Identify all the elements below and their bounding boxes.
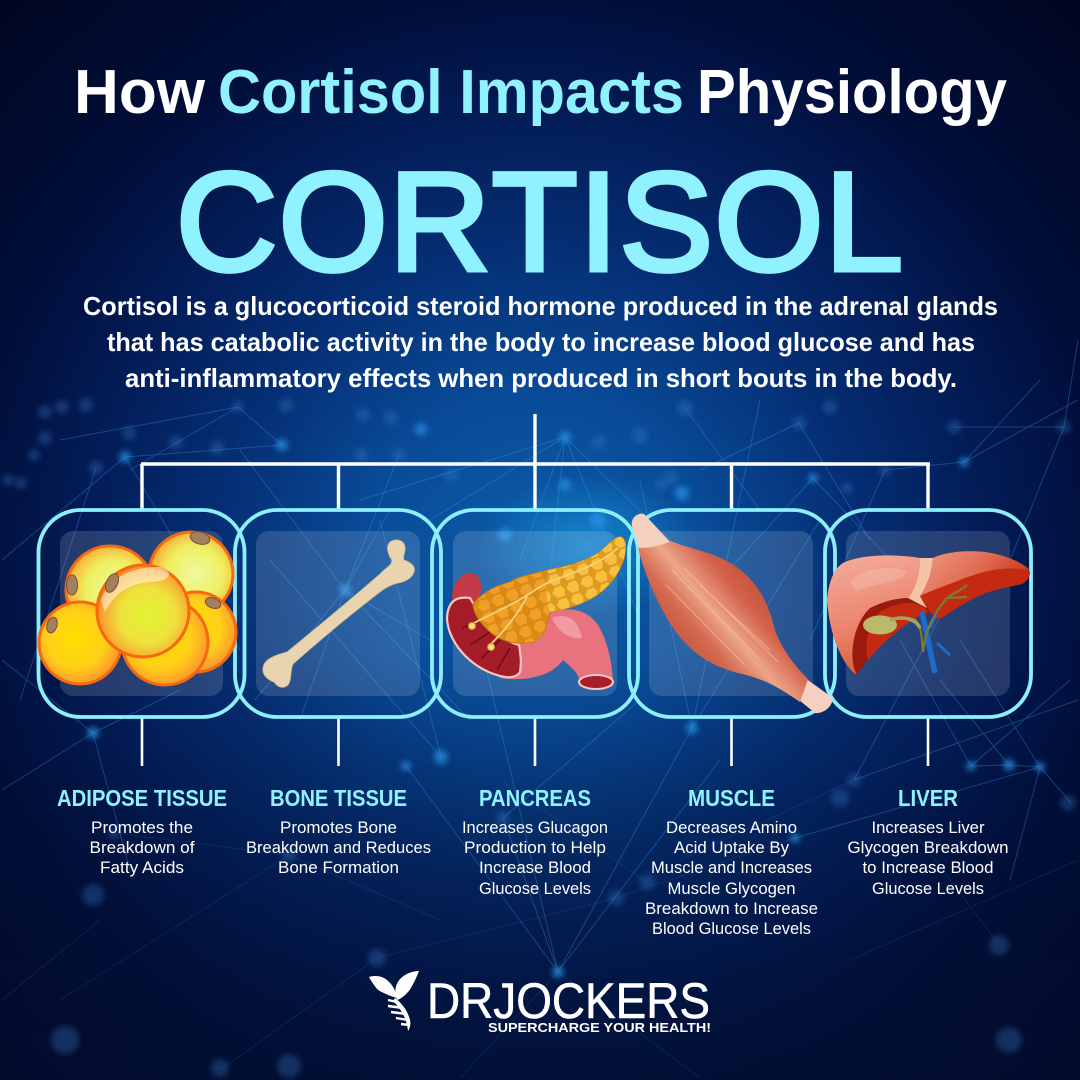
label: bone tissue: Breakdown and Reduces	[246, 838, 431, 857]
intro paragraph: Cortisol is a glucocorticoid steroid hormone produced in the adrenal glands	[83, 291, 998, 321]
icon: pancreas	[447, 537, 626, 689]
panel backgrounds	[60, 531, 1010, 696]
panel frames	[38, 510, 1031, 717]
icon: bone	[263, 540, 414, 687]
title: Cortisol Impacts	[218, 58, 684, 127]
label: liver: Glycogen Breakdown	[848, 838, 1008, 857]
label: adipose tissue	[57, 785, 227, 877]
label: bone tissue: Bone Formation	[278, 858, 399, 877]
label: bone tissue: BONE TISSUE	[270, 785, 407, 811]
icon: adipose cells	[39, 530, 236, 685]
label: muscle: Blood Glucose Levels	[652, 919, 811, 938]
label: adipose tissue: Fatty Acids	[100, 858, 184, 877]
label: adipose tissue: ADIPOSE TISSUE	[57, 785, 227, 811]
label: muscle: Acid Uptake By	[674, 838, 789, 857]
label: adipose tissue: Breakdown of	[90, 838, 195, 857]
label: pancreas: Glucose Levels	[479, 879, 591, 898]
connector tree	[141, 414, 930, 766]
label: muscle: Muscle Glycogen	[668, 879, 796, 898]
label: muscle: MUSCLE	[688, 785, 775, 811]
label: liver: LIVER	[898, 785, 958, 811]
pink intestine	[500, 609, 613, 682]
label: liver	[848, 785, 1008, 898]
label: pancreas: Increase Blood	[479, 858, 591, 877]
logo: DrJockers	[369, 971, 711, 1035]
label: liver: to Increase Blood	[862, 858, 994, 877]
title: How	[74, 58, 206, 127]
logo: DrJockers: DRJOCKERS	[427, 973, 710, 1029]
intro paragraph: that has catabolic activity in the body to increase blood glucose and has	[107, 327, 975, 357]
label: muscle: Muscle and Increases	[651, 858, 812, 877]
label: muscle: Breakdown to Increase	[645, 899, 818, 918]
label: bone tissue	[246, 785, 431, 877]
intro paragraph	[83, 291, 998, 393]
logo: DrJockers: SUPERCHARGE YOUR HEALTH!	[488, 1020, 711, 1035]
icon: muscle	[632, 514, 833, 713]
label: bone tissue: Promotes Bone	[280, 818, 397, 837]
label: pancreas: Increases Glucagon	[462, 818, 608, 837]
title: Physiology	[697, 58, 1007, 127]
label: pancreas: Production to Help	[464, 838, 606, 857]
label: pancreas: PANCREAS	[479, 785, 591, 811]
intro paragraph: anti-inflammatory effects when produced in short bouts in the body.	[125, 363, 957, 393]
pancreas body	[473, 537, 626, 643]
label: muscle: Decreases Amino	[666, 818, 797, 837]
icon: liver	[827, 551, 1030, 675]
title	[74, 58, 1007, 127]
heading: CORTISOL: CORTISOL	[176, 143, 904, 300]
duodenum	[452, 573, 481, 612]
label: muscle	[645, 785, 818, 938]
label: pancreas	[462, 785, 608, 898]
label: liver: Glucose Levels	[872, 879, 984, 898]
label: liver: Increases Liver	[872, 818, 985, 837]
label: adipose tissue: Promotes the	[91, 818, 193, 837]
